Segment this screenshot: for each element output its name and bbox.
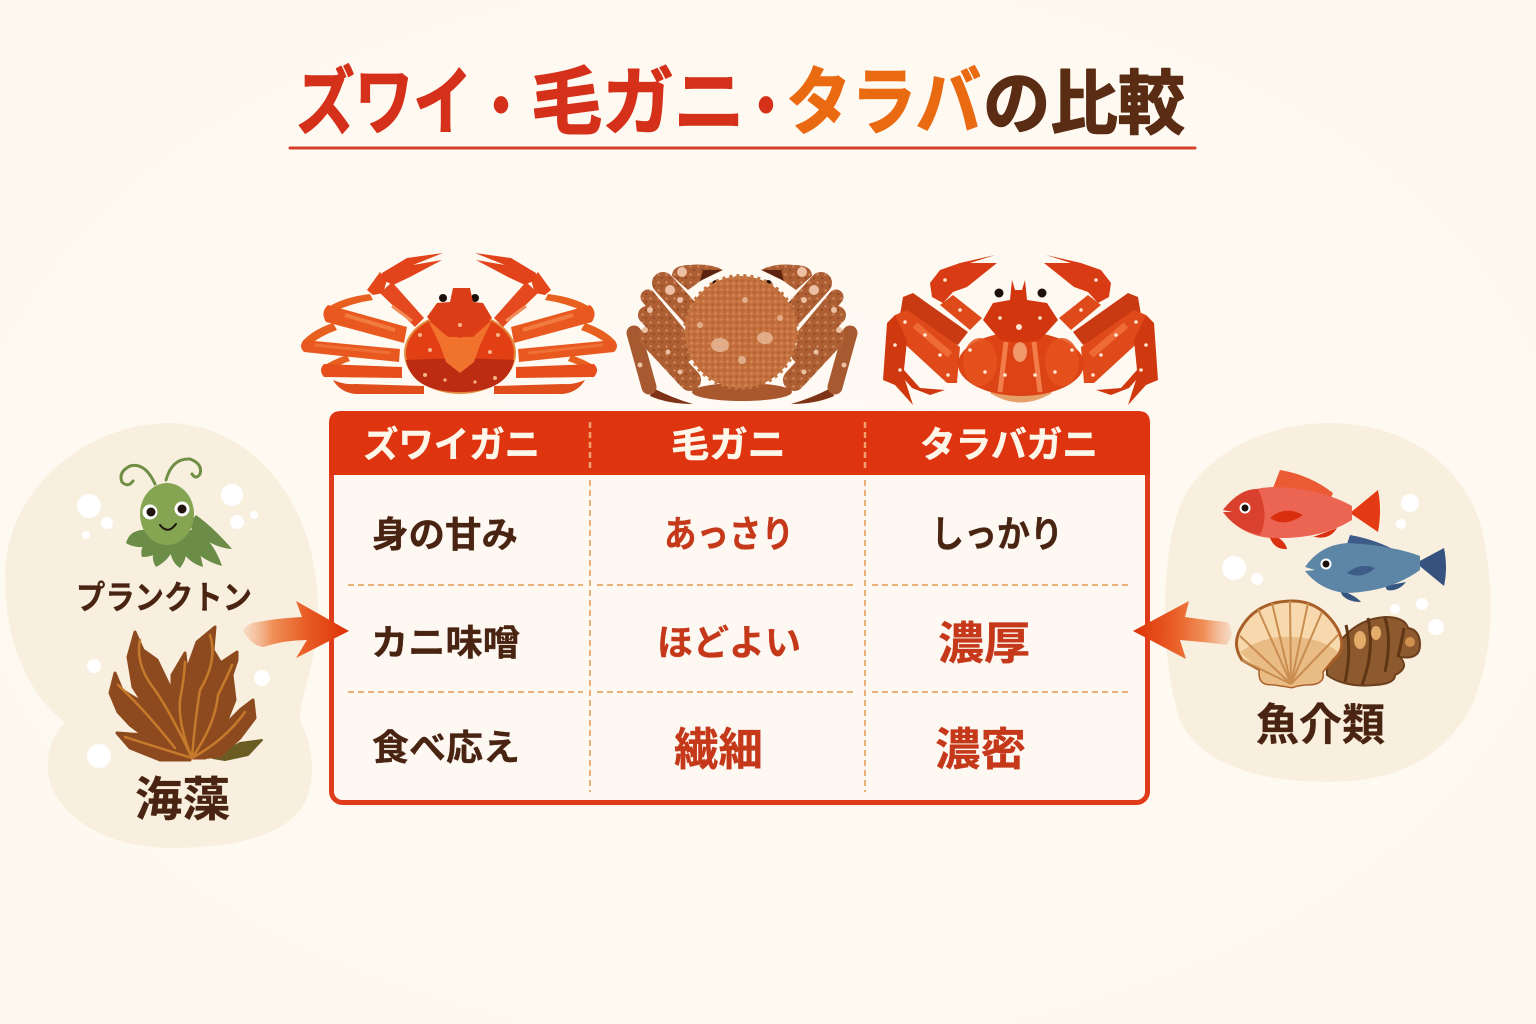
bubbles	[77, 484, 270, 768]
row 3: 食べ応え	[372, 727, 520, 768]
row 1: 身の甘み	[372, 514, 518, 555]
row 3: 濃密	[935, 724, 1026, 775]
panel: right food source blob	[1165, 423, 1491, 782]
row 1: あっさり	[664, 514, 794, 555]
row 1	[372, 514, 1063, 555]
row 2: 濃厚	[938, 618, 1030, 669]
label: プランクトン: プランクトン	[76, 579, 252, 616]
row 2: カニ味噌	[371, 622, 520, 663]
title: ズワイ	[296, 61, 472, 144]
title: タラバ	[786, 61, 981, 144]
bubbles	[1222, 494, 1444, 635]
column heading: ズワイガニ: ズワイガニ	[363, 424, 540, 465]
title underline	[290, 147, 1195, 148]
label: 魚介類: 魚介類	[1256, 701, 1385, 750]
icon: blue fish	[1305, 535, 1446, 602]
row 2: ほどよい	[657, 622, 801, 663]
row 2	[371, 618, 1030, 669]
king crab illustration	[883, 255, 1158, 405]
row 1: しっかり	[931, 514, 1063, 555]
title: の比較	[983, 65, 1185, 143]
icon: scallop shell	[1236, 601, 1342, 687]
arrow: right source to table	[1133, 601, 1232, 659]
icon: whelk shell	[1327, 617, 1420, 686]
row 3: 繊細	[674, 724, 763, 775]
row 3	[372, 724, 1026, 775]
column and row dividers	[348, 422, 1132, 792]
column heading: タラバガニ: タラバガニ	[920, 424, 1098, 465]
panel: comparison table	[329, 411, 1150, 802]
title: 毛ガニ	[531, 61, 745, 144]
panel: left food source blob	[5, 423, 318, 848]
arrow: left source to table	[243, 601, 349, 658]
title	[296, 61, 1185, 144]
title: ・	[476, 74, 526, 141]
icon: seaweed	[110, 627, 262, 760]
icon: plankton	[121, 459, 232, 568]
column heading: 毛ガニ: 毛ガニ	[671, 424, 786, 465]
table header band	[329, 411, 1150, 475]
icon: red fish	[1223, 470, 1380, 549]
title: ・	[741, 74, 791, 141]
label: 海藻: 海藻	[135, 773, 230, 826]
snow crab illustration	[301, 253, 617, 394]
hairy crab illustration	[634, 265, 850, 404]
